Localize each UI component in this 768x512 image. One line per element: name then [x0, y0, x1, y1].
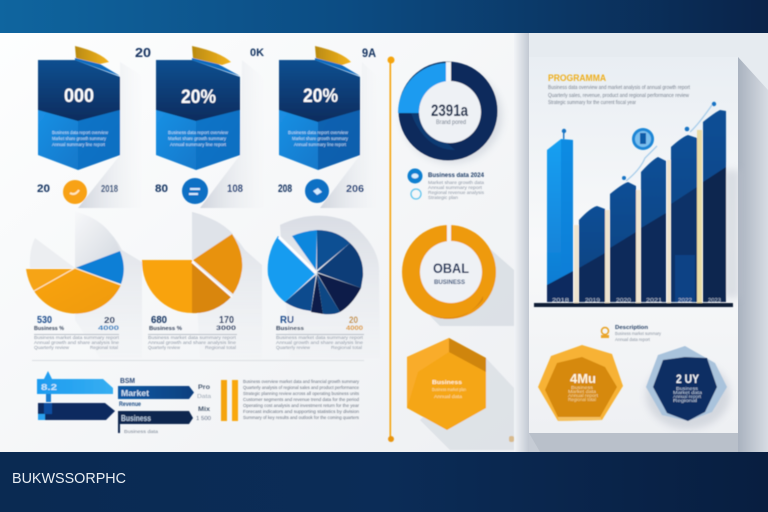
- pie 1 caption: 20: [104, 316, 116, 325]
- pie 3 caption: Annual growth and share analysis line: [276, 340, 363, 345]
- row of icons and labels under cards: 20: [37, 183, 50, 195]
- text: [673, 386, 703, 403]
- text: Regional: [673, 398, 697, 403]
- pie 3 caption: RU: [280, 315, 294, 326]
- hexagon: orange: [407, 338, 514, 450]
- card text: [168, 130, 229, 147]
- label: BSM: [120, 378, 135, 385]
- pie chart 1: [26, 212, 142, 358]
- row of icons and labels under cards: [37, 178, 364, 204]
- hexagon text: [432, 387, 466, 399]
- card text: Market share growth summary: [292, 136, 349, 141]
- arrow: navy label bar: Business: [121, 414, 151, 423]
- row of icons and labels under cards: 208: [278, 183, 292, 195]
- pie 2 caption: Business market data summary report: [148, 335, 237, 340]
- arrow: light blue: 8.2: [41, 383, 58, 392]
- shadows behind cards: [78, 60, 379, 208]
- pie 1 caption: [34, 315, 120, 350]
- text: [568, 385, 599, 402]
- bar 5: [671, 135, 697, 302]
- pie 3 caption: Quarterly review: [276, 345, 311, 350]
- pie 1 caption: Annual growth and share analysis line: [34, 340, 119, 345]
- donut label: BUSINESS: [434, 279, 466, 286]
- arrow bars diagram: [37, 371, 211, 434]
- card text: [288, 130, 349, 147]
- pie 3 caption: Regional total: [331, 345, 362, 350]
- top year labels: 0K: [250, 47, 264, 59]
- row of icons and labels under cards: 2018: [101, 184, 118, 195]
- pie 2 caption: Quarterly review: [148, 345, 181, 350]
- legend text: Regional revenue analysis: [428, 190, 485, 195]
- callout text: [615, 331, 662, 342]
- value: 4Mu: [570, 371, 596, 386]
- legend text: [428, 180, 485, 200]
- text: Business: [571, 385, 593, 390]
- orange double bar: [221, 380, 238, 421]
- timeline line: [388, 56, 514, 442]
- card text: Business data report overview: [168, 130, 229, 135]
- bar labels: 2022: [678, 298, 692, 304]
- side values: Data: [197, 394, 211, 400]
- card text: Annual summary line report: [170, 142, 227, 147]
- card text: Annual summary line report: [52, 142, 106, 147]
- text: Regional total: [568, 397, 596, 402]
- header band: [0, 0, 768, 33]
- right panel intro text: Business data overview and market analysis of annual growth report: [548, 85, 691, 91]
- donut chart: orange: [402, 225, 514, 326]
- legend text: Strategic plan: [428, 195, 458, 200]
- pie 2 caption: [148, 315, 237, 350]
- card text: Market share growth summary: [52, 136, 107, 141]
- icon: bubble: [632, 128, 654, 150]
- donut label: Brand pored: [436, 119, 466, 126]
- pie 1 caption: Quarterly review: [34, 345, 70, 350]
- top year labels: 20: [135, 45, 151, 60]
- donut value: 2391a: [431, 101, 468, 120]
- heptagon: orange: [538, 345, 623, 421]
- value: 2 UY: [676, 372, 699, 386]
- card text: Business data report overview: [288, 130, 349, 135]
- pie 2 caption: Business %: [149, 326, 182, 332]
- row of icons and labels under cards: 80: [155, 183, 168, 195]
- bar tips: [562, 102, 716, 180]
- separators: [574, 130, 702, 303]
- donut value: OBAL: [433, 261, 469, 276]
- text: Annual report: [673, 394, 702, 399]
- card value: 000: [64, 86, 94, 107]
- paragraph text: Summary of key results and outlook for the coming quarters: [243, 415, 360, 420]
- pie 1 caption: Business %: [34, 326, 64, 332]
- right panel intro text: [548, 85, 691, 106]
- text: Business: [676, 386, 698, 391]
- bar labels: 2023: [708, 298, 721, 304]
- pie 2 caption: 3000: [216, 326, 237, 332]
- callout text: Annual data report: [615, 337, 651, 342]
- icon: bulb: [601, 328, 609, 338]
- pie chart 3: [268, 216, 380, 358]
- footer title: BUKWSSORPHC: [12, 470, 126, 487]
- pie 3 caption: 20: [349, 315, 358, 325]
- pie 3 caption: Business: [276, 326, 304, 332]
- paragraph text: Forecast indicators and supporting statistics by division: [243, 409, 359, 414]
- callout title: Description: [615, 325, 649, 331]
- top year labels: 9A: [362, 46, 376, 60]
- bar 2: [579, 206, 605, 302]
- icon: ring: [411, 189, 421, 199]
- donut chart: blue: [398, 62, 502, 163]
- footer band: [0, 452, 768, 512]
- callout text: Business market summary: [615, 331, 662, 336]
- arrow: navy label bar: [118, 411, 193, 424]
- side values: Mix: [198, 407, 211, 413]
- right panel intro text: Strategic summary for the current fiscal year: [548, 100, 636, 106]
- top year labels: [135, 45, 376, 60]
- note: Business data: [124, 429, 159, 434]
- icon: blue badge: [305, 179, 329, 203]
- paragraph text: Operating cost analysis and investment return for the year: [243, 403, 359, 408]
- arrow: mid blue label bar: Market: [121, 389, 149, 398]
- right panel background: [514, 33, 768, 452]
- main white panel: [0, 33, 514, 452]
- paragraph text: Quarterly analysis of regional sales and product performance: [243, 385, 359, 390]
- legend text: Annual summary report: [428, 185, 483, 190]
- icon: filled blue dot: [408, 168, 422, 184]
- side values: [196, 385, 211, 422]
- text: Market data: [673, 390, 703, 395]
- paragraph text: Strategic planning review across all operating business units: [243, 391, 360, 396]
- card value: 20%: [181, 87, 216, 108]
- panel: pentagon card 1: [38, 46, 120, 170]
- arrow: mid blue label bar: [118, 386, 194, 399]
- paragraph text: Customer segments and revenue trend data for the period: [243, 397, 359, 402]
- x axis base: [534, 303, 733, 307]
- icon: orange badge: [63, 180, 87, 204]
- pie 3 caption: Business market data summary report: [276, 335, 364, 340]
- hexagon text: Business market plan: [432, 387, 466, 392]
- arrow: light blue: [37, 371, 113, 402]
- pie 2 caption: 680: [151, 315, 167, 326]
- pie 2 caption: 170: [219, 315, 234, 326]
- side values: Pro: [198, 385, 210, 391]
- text: Annual report: [568, 393, 599, 398]
- pie 1 caption: 530: [37, 315, 52, 326]
- bar 6: [703, 110, 726, 302]
- small callout: [601, 325, 662, 342]
- row of icons and labels under cards: 206: [346, 184, 364, 195]
- bar 4: [641, 157, 666, 302]
- right panel intro text: Quarterly sales, revenue, product and regional performance review: [548, 93, 689, 99]
- paragraph text: Business overview market data and financial growth summary: [243, 379, 360, 384]
- bar labels: [552, 298, 721, 304]
- legend heading: Business data 2024: [428, 172, 484, 179]
- pie 1 caption: 4000: [98, 326, 120, 332]
- paragraph text: [243, 379, 360, 420]
- panel: pentagon card 3: [279, 46, 360, 170]
- label: Revenue: [119, 402, 142, 408]
- bar labels: 2021: [646, 298, 662, 304]
- bar 1: [547, 139, 573, 302]
- icon: blue badge: [182, 178, 208, 204]
- pie chart 2: [142, 212, 262, 358]
- pie 2 caption: Regional total: [205, 345, 236, 350]
- panel: pentagon card 2: [156, 46, 240, 170]
- card text: Market share growth summary: [168, 136, 227, 141]
- bar 3: [610, 182, 636, 302]
- trend curve: [626, 105, 712, 181]
- hexagon text: Annual data: [434, 394, 462, 399]
- legend text: Market share growth data: [428, 180, 484, 185]
- pie 2 caption: Annual growth and share analysis line: [148, 340, 236, 345]
- card text: [52, 130, 109, 147]
- arrow: navy: [38, 403, 115, 420]
- right panel heading: PROGRAMMA: [548, 73, 606, 83]
- bar labels: 2018: [552, 298, 569, 304]
- bar labels: 2020: [616, 298, 631, 304]
- heptagon: navy: [646, 346, 730, 429]
- text: Market data: [568, 389, 597, 394]
- bar chart: [534, 102, 740, 307]
- bar labels: 2019: [585, 298, 600, 304]
- hexagon title: Business: [432, 380, 462, 386]
- pie 1 caption: Regional total: [90, 345, 118, 350]
- pie 3 caption: [276, 315, 364, 350]
- legend block: [408, 168, 485, 200]
- pie 1 caption: Business market data summary report: [34, 335, 120, 340]
- card value: 20%: [303, 86, 338, 107]
- card text: Business data report overview: [52, 130, 109, 135]
- pie 3 caption: 4000: [346, 326, 364, 332]
- row of icons and labels under cards: 108: [227, 183, 243, 195]
- side values: 1 500: [196, 416, 211, 422]
- card text: Annual summary line report: [294, 142, 347, 147]
